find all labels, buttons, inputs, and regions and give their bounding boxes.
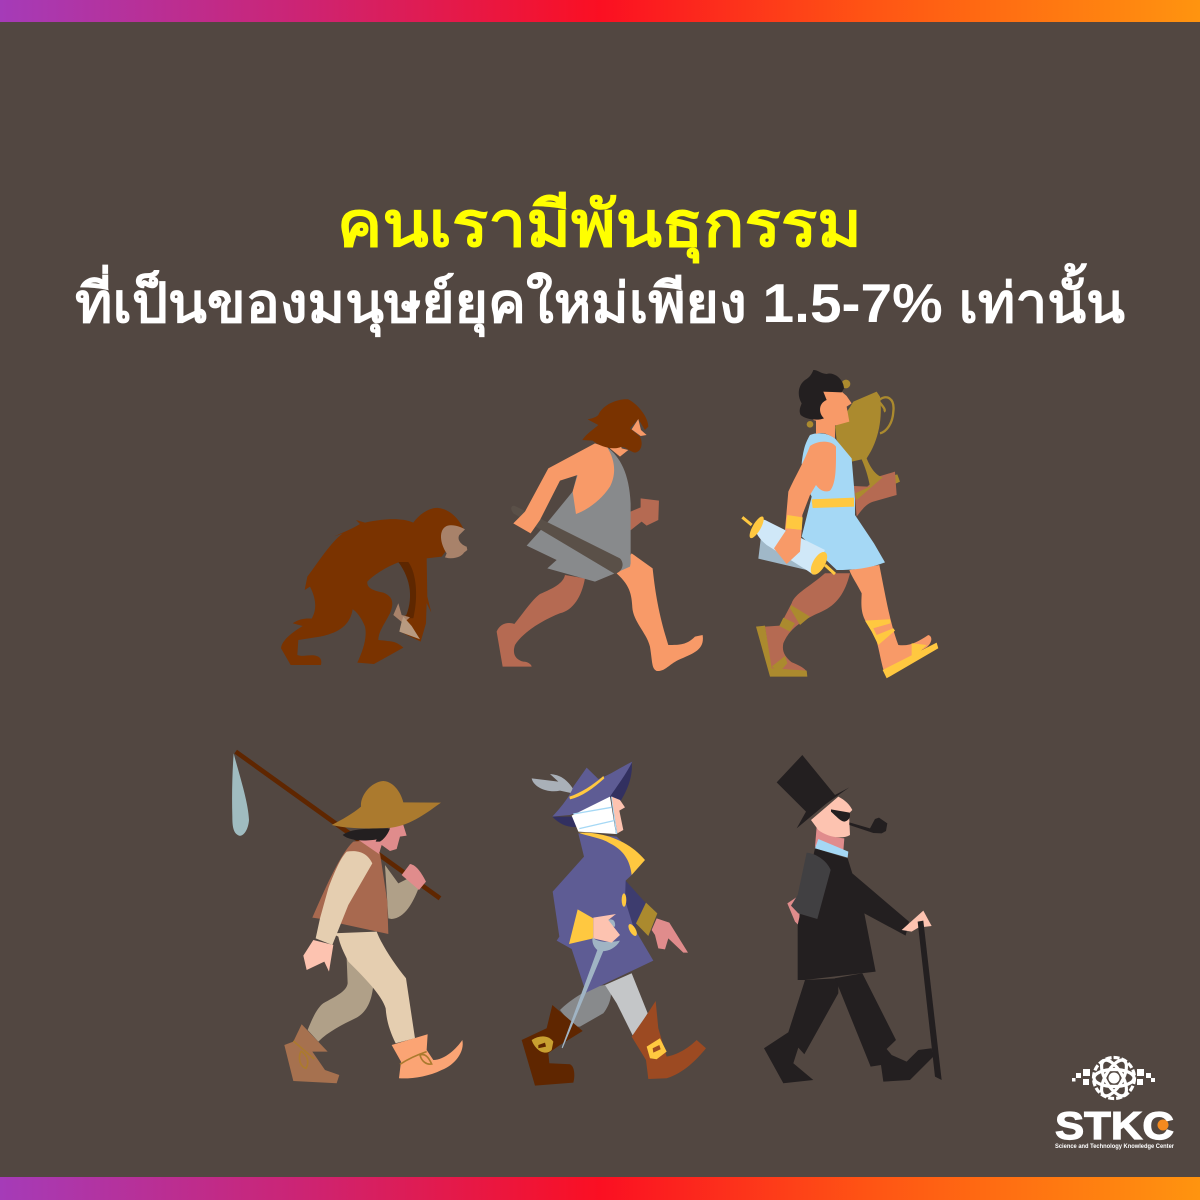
figure: caveman [497, 399, 703, 671]
title line 1: คนเรามีพันธุกรรม [337, 190, 862, 264]
logo pixel dots [1072, 1069, 1155, 1085]
figure: greek man with trophy and scroll [742, 370, 938, 678]
logo tagline: Science and Technology Knowledge Center [1055, 1144, 1175, 1150]
figure: gentleman with top hat and cane [764, 755, 942, 1083]
bottom gradient bar [0, 1177, 1200, 1200]
logo: STKC [1055, 1056, 1175, 1150]
figure: ape [281, 508, 467, 665]
figure: farmer with bindle [232, 752, 463, 1083]
logo wordmark: STKC [1055, 1105, 1174, 1148]
top gradient bar [0, 0, 1200, 22]
logo orange dot [1158, 1120, 1168, 1130]
title [75, 190, 1125, 338]
title line 2: ที่เป็นของมนุษย์ยุคใหม่เพียง 1.5-7% เท่านั้น [75, 263, 1125, 338]
logo atom icon [1094, 1056, 1134, 1100]
figure: musketeer [522, 762, 706, 1086]
